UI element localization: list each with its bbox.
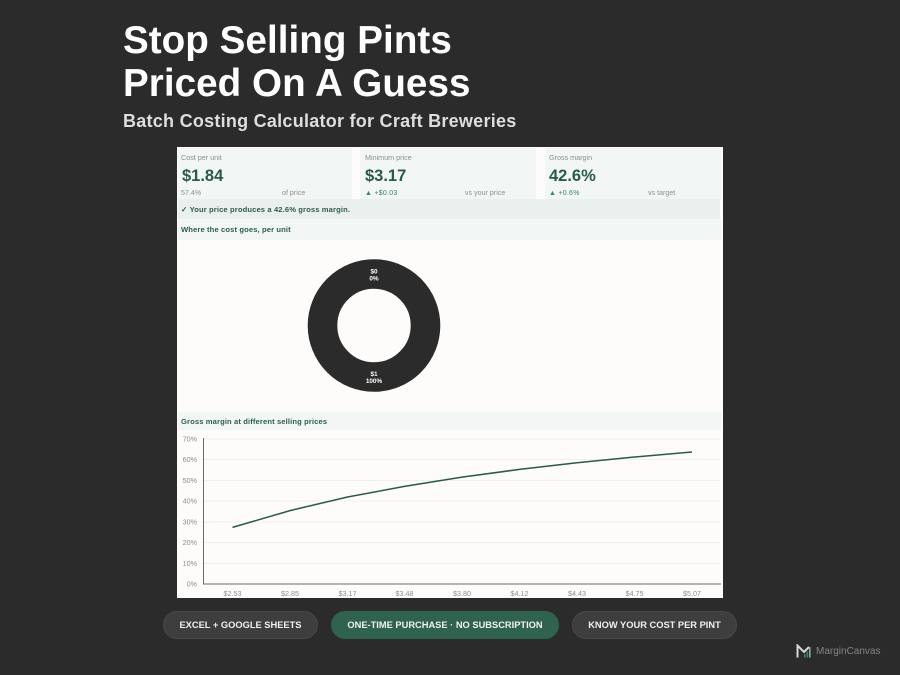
donut chart: 100%: [366, 378, 382, 385]
title: Priced On A Guess: [123, 62, 470, 104]
value: cost per unit: $1.84: [182, 167, 223, 185]
line chart: gross margin by price: 50%: [183, 476, 198, 485]
donut chart: [308, 259, 440, 392]
line chart: gross margin by price: $3.48: [396, 589, 414, 598]
line chart: gross margin by price: $2.53: [224, 589, 242, 598]
heading band: cost breakdown: [178, 219, 721, 240]
panel: cost per unit card: [178, 148, 352, 199]
line chart: gross margin by price: 20%: [183, 538, 198, 547]
wordmark: MarginCanvas: [816, 646, 880, 656]
banner text: ✓ Your price produces a 42.6% gross margin.: [181, 205, 350, 214]
line chart: gross margin by price: 30%: [183, 518, 198, 526]
line chart: gross margin by price: 10%: [183, 559, 198, 568]
banner: margin status: [178, 199, 720, 219]
line chart: gross margin by price: [182, 434, 721, 598]
label: minimum price: Minimum price: [365, 153, 412, 162]
note: of price: of price: [282, 190, 305, 197]
heading band: margin chart: [178, 412, 721, 430]
line chart: gross margin by price: 70%: [183, 434, 198, 444]
panel: minimum price card: [360, 148, 536, 199]
line chart: gross margin by price: $3.80: [453, 589, 471, 598]
pill: one-time purchase: ONE-TIME PURCHASE · NO SUBSCRIPTION: [347, 620, 543, 630]
subtitle: Batch Costing Calculator for Craft Breweries: [123, 111, 517, 131]
panel: spreadsheet screenshot: [177, 147, 723, 598]
pill: excel + google sheets: [163, 611, 318, 639]
label: cost per unit: Cost per unit: [181, 153, 222, 162]
heading: gross margin at different prices: Gross margin at different selling prices: [181, 417, 327, 426]
pill: know your cost per pint: KNOW YOUR COST PER PINT: [588, 620, 721, 630]
line chart: gross margin by price: 40%: [183, 496, 198, 506]
line chart: gross margin by price: $4.43: [568, 589, 586, 598]
title: Stop Selling Pints: [123, 19, 452, 62]
heading: where the cost goes: Where the cost goes, per unit: [181, 225, 291, 234]
note: vs target: vs target: [648, 190, 675, 197]
donut chart: $0: [370, 268, 378, 276]
note: price delta: ▲ +$0.03: [365, 190, 397, 197]
note: margin delta: ▲ +0.6%: [549, 190, 580, 197]
note: vs your price: vs your price: [465, 190, 505, 197]
pill: one-time purchase: [331, 611, 559, 639]
icon: M mark: [796, 644, 811, 658]
line chart: gross margin by price: $4.12: [510, 589, 528, 598]
line chart: gross margin by price: $2.85: [281, 589, 299, 598]
label: gross margin: Gross margin: [549, 153, 592, 162]
line chart: gross margin by price: $3.17: [338, 589, 356, 598]
line chart: gross margin by price: 60%: [183, 455, 198, 464]
value: minimum price: $3.17: [365, 167, 406, 185]
line chart: gross margin by price: $4.75: [626, 589, 644, 598]
value: gross margin: 42.6%: [549, 167, 596, 185]
pill: excel + google sheets: EXCEL + GOOGLE SHEETS: [179, 620, 302, 630]
donut chart: $1: [370, 371, 378, 378]
line chart: gross margin by price: 0%: [187, 580, 198, 588]
panel: gross margin card: [545, 148, 721, 199]
donut chart: 0%: [369, 276, 379, 282]
title: [123, 19, 470, 104]
note: share of price: 57.4%: [181, 190, 201, 197]
logo: MarginCanvas: [796, 644, 880, 658]
line chart: gross margin by price: $5.07: [683, 589, 701, 598]
pill: know your cost per pint: [572, 611, 737, 639]
